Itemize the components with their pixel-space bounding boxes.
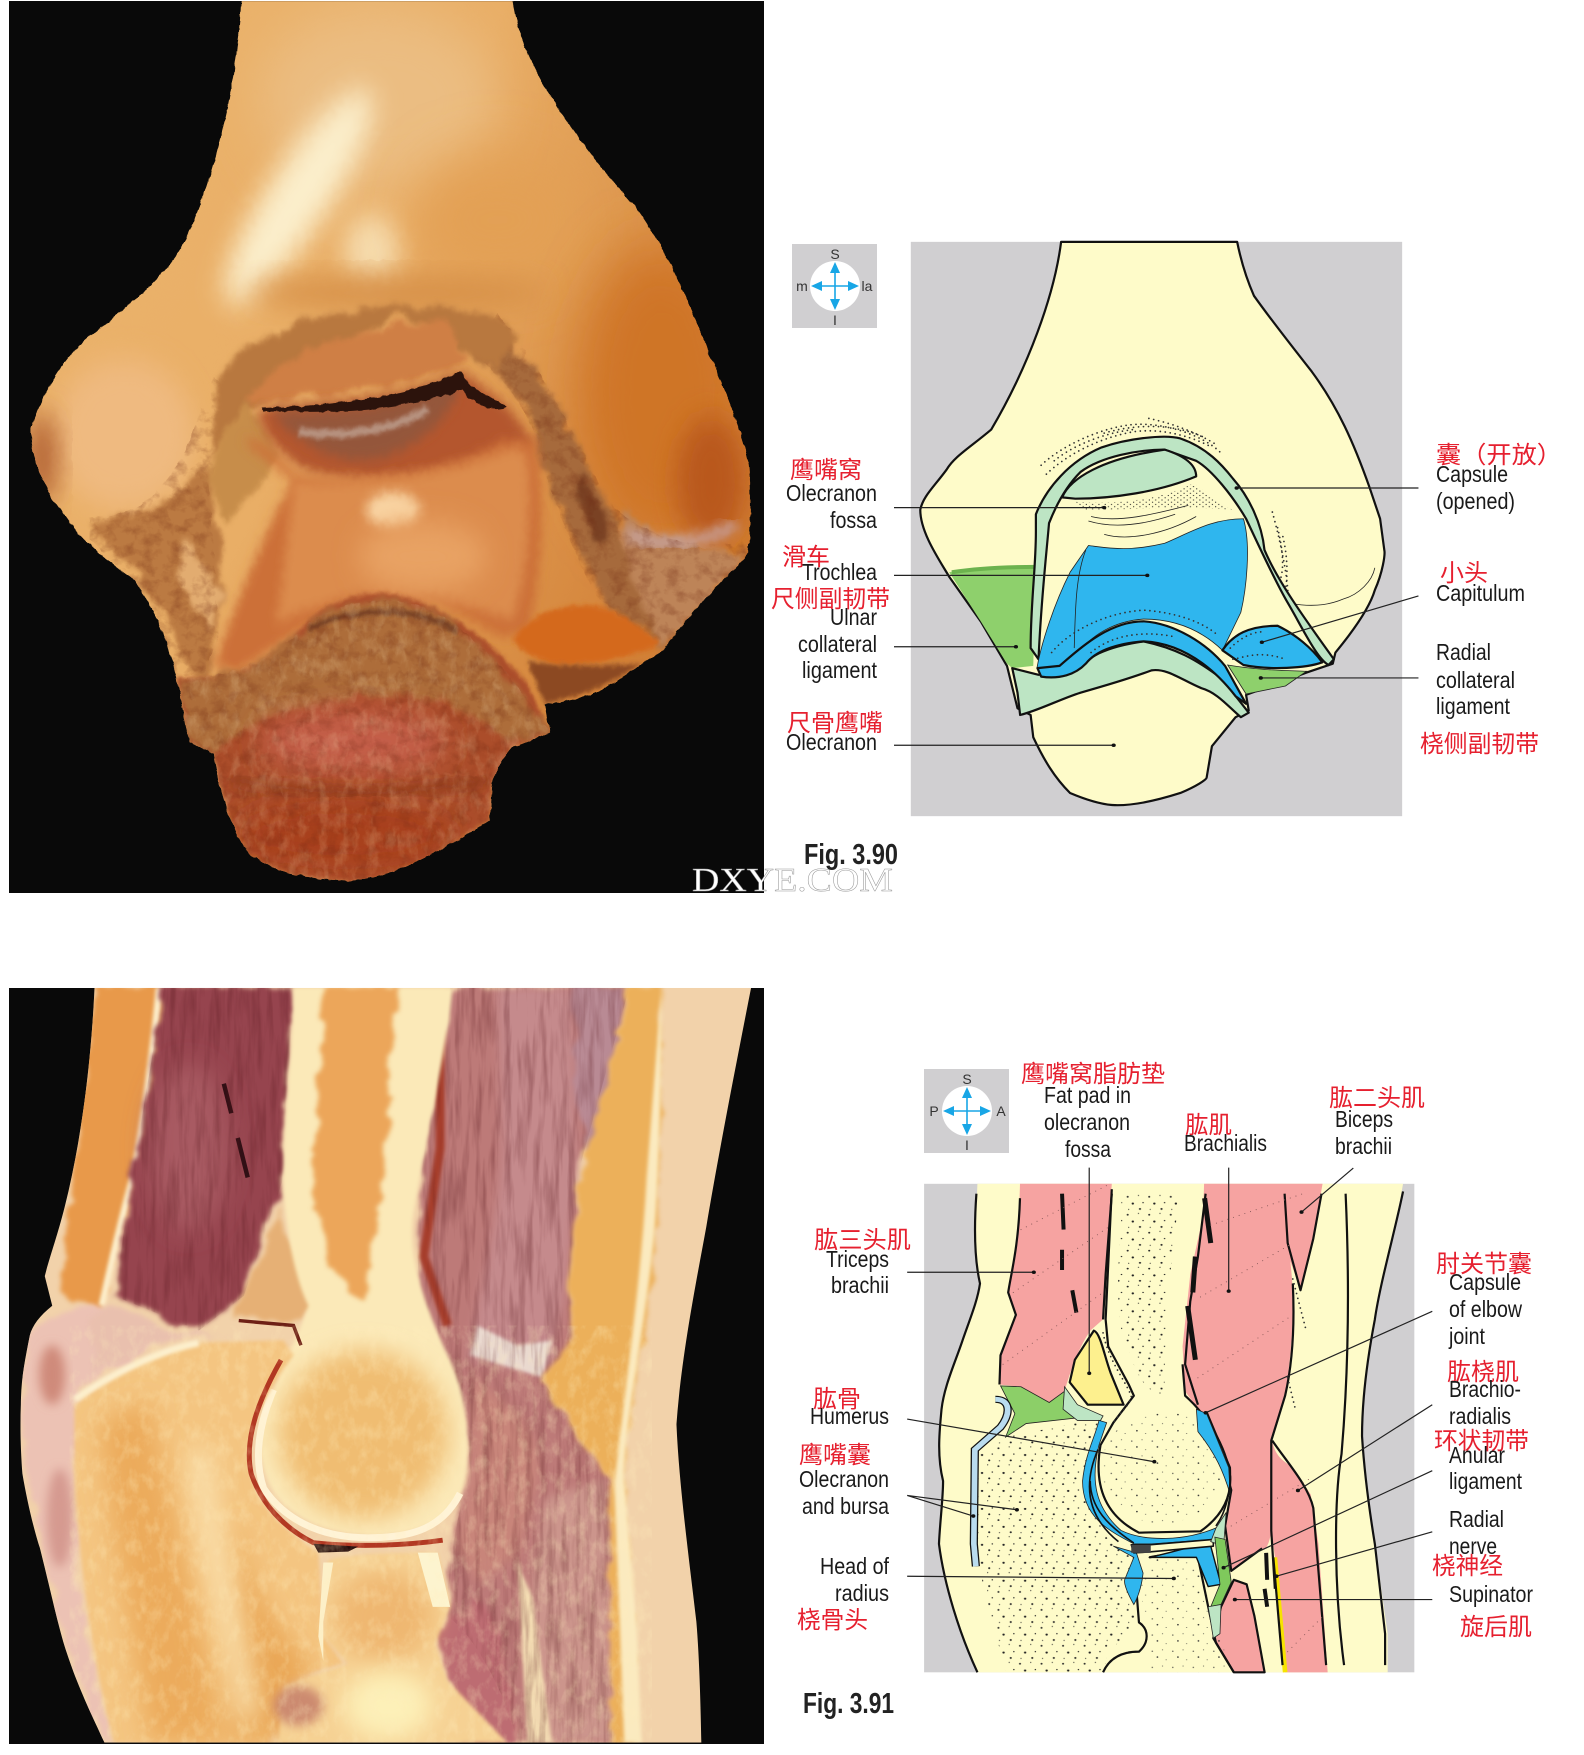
anular ligament: [1211, 1537, 1231, 1607]
radius: [279, 1553, 507, 1743]
label: olecranon: [786, 710, 883, 755]
orientation compass: S I m la: I: [833, 312, 837, 328]
label: ulnar collateral ligament: [771, 586, 890, 683]
label: radial collateral ligament: 桡侧副韧带: [1420, 731, 1539, 758]
ulnar collateral ligament: [949, 566, 1036, 668]
label: head of radius: [797, 1553, 890, 1634]
label: capitulum: [1436, 560, 1525, 606]
label: capitulum: 小头: [1440, 560, 1488, 587]
label: biceps brachii: [1329, 1085, 1425, 1159]
label: ulnar collateral ligament: collateral: [798, 631, 877, 657]
label: trochlea: [782, 544, 877, 585]
label: head of radius: Head of: [820, 1553, 890, 1579]
label: ulnar collateral ligament: 尺侧副韧带: [771, 586, 890, 613]
label: capsule of elbow joint: Capsule: [1449, 1269, 1521, 1295]
orientation compass: S I m la: [792, 244, 877, 328]
label: humerus: Humerus: [810, 1403, 889, 1429]
label: olecranon: Olecranon: [786, 729, 877, 755]
label: capsule of elbow joint: of elbow: [1449, 1296, 1522, 1322]
olecranon fat pad: [1070, 1331, 1124, 1405]
label: radial nerve: Radial: [1449, 1506, 1504, 1532]
label: radial collateral ligament: collateral: [1436, 667, 1515, 693]
label: trochlea: Trochlea: [802, 559, 877, 585]
label: radial nerve: nerve: [1449, 1533, 1497, 1559]
label: triceps brachii: brachii: [831, 1272, 889, 1298]
diagram: Fig. 3.90 humerus posterior view: [894, 242, 1418, 816]
label: humerus: [810, 1386, 889, 1429]
figure caption: Fig. 3.90: Fig. 3.90: [804, 839, 898, 871]
label: brachioradialis: [1447, 1359, 1521, 1429]
label: capsule of elbow joint: [1436, 1251, 1532, 1349]
supinator muscle: [1213, 1580, 1265, 1672]
orientation compass: S I P A: I: [965, 1137, 969, 1153]
joint line: [239, 1321, 301, 1345]
label: radial collateral ligament: [1420, 639, 1539, 758]
leader lines: [907, 1168, 1432, 1601]
label: anular ligament: Anular: [1449, 1442, 1505, 1468]
label: supinator: [1449, 1581, 1533, 1641]
orientation compass: S I m la: m: [796, 278, 808, 294]
label: supinator: 旋后肌: [1460, 1614, 1532, 1641]
leader lines: [894, 486, 1418, 747]
label: capitulum: Capitulum: [1436, 580, 1525, 606]
label: capsule opened: Capsule: [1436, 461, 1508, 487]
label: olecranon and bursa: 鹰嘴囊: [799, 1442, 871, 1469]
label: capsule of elbow joint: joint: [1448, 1323, 1486, 1349]
label: radial collateral ligament: Radial: [1436, 639, 1491, 665]
label: ulnar collateral ligament: Ulnar: [830, 604, 877, 630]
medial stipple: [1041, 418, 1220, 474]
watermark: DXYE.COM: DXYE.COM: [692, 862, 893, 899]
label: olecranon fossa: fossa: [830, 507, 877, 533]
radial collateral ligament: [1228, 665, 1307, 694]
label: biceps brachii: brachii: [1335, 1133, 1392, 1159]
ulna stipple: [977, 1423, 1139, 1672]
label: ulnar collateral ligament: ligament: [802, 657, 878, 683]
trochlea, articular cartilage: [1037, 519, 1247, 668]
label: olecranon and bursa: Olecranon: [799, 1466, 889, 1492]
label: radial nerve: [1432, 1506, 1504, 1580]
radial nerve: [1275, 1557, 1285, 1672]
photo: sagittal section of the elbow, Fig. 3.91: [0, 980, 776, 1750]
label: anular ligament: ligament: [1449, 1468, 1523, 1494]
label: triceps brachii: [814, 1227, 911, 1298]
label: radial collateral ligament: ligament: [1436, 693, 1511, 719]
label: olecranon and bursa: and bursa: [802, 1493, 889, 1519]
label: capsule opened: [1436, 442, 1562, 514]
capitulum: [1222, 626, 1322, 668]
humerus bone outline: [1099, 1189, 1230, 1533]
label: supinator: Supinator: [1449, 1581, 1533, 1607]
label: fat pad in olecranon fossa: Fat pad in: [1044, 1082, 1131, 1108]
label: olecranon fossa: [786, 457, 877, 533]
triceps muscle: [114, 988, 293, 1330]
label: capsule opened: 囊（开放）: [1436, 442, 1562, 469]
label: capsule opened: (opened): [1436, 488, 1515, 514]
humerus shaft stipple: [1118, 1194, 1177, 1396]
label: olecranon fossa: 鹰嘴窝: [790, 457, 862, 484]
anterior muscle: [418, 988, 629, 1743]
triceps brachii muscle: [999, 1184, 1112, 1402]
orientation compass: S I P A: [924, 1069, 1009, 1153]
label: triceps brachii: 肱三头肌: [814, 1227, 911, 1254]
label: capsule of elbow joint: 肘关节囊: [1436, 1251, 1532, 1278]
orientation compass: S I m la: S: [830, 246, 840, 262]
orientation compass: S I P A: S: [962, 1071, 972, 1087]
label: brachioradialis: Brachio-: [1449, 1376, 1521, 1402]
label: olecranon fossa: Olecranon: [786, 480, 877, 506]
label: biceps brachii: Biceps: [1335, 1106, 1393, 1132]
label: humerus: 肱骨: [813, 1386, 861, 1413]
label: brachialis: Brachialis: [1184, 1130, 1267, 1156]
label: anular ligament: 环状韧带: [1434, 1428, 1529, 1455]
label: fat pad in olecranon fossa: [1021, 1061, 1165, 1162]
figure caption: Fig. 3.91: Fig. 3.91: [803, 1688, 894, 1720]
label: trochlea: 滑车: [782, 544, 830, 571]
photo: posterior view of dissected elbow joint, Fig. 3.90: [0, 0, 776, 893]
triceps tendon insertion: [1001, 1386, 1075, 1437]
label: fat pad in olecranon fossa: 鹰嘴窝脂肪垫: [1021, 1061, 1165, 1088]
label: brachioradialis: 肱桡肌: [1447, 1359, 1519, 1386]
diagram: Fig. 3.91 sagittal section: [907, 1168, 1432, 1672]
limb skin and subcutaneous fat: [939, 1184, 1403, 1672]
fat, posterior: [60, 988, 164, 1311]
label: brachialis: [1184, 1112, 1267, 1156]
label: fat pad in olecranon fossa: fossa: [1065, 1136, 1111, 1162]
olecranon bursa: [974, 1399, 1008, 1566]
label: radial nerve: 桡神经: [1432, 1553, 1503, 1580]
label: brachioradialis: radialis: [1449, 1403, 1511, 1429]
humerus and olecranon outline: [920, 242, 1385, 805]
grey diagram panel: [924, 1184, 1414, 1672]
radius stipple: [1139, 1557, 1231, 1672]
label: olecranon and bursa: [799, 1442, 889, 1519]
label: biceps brachii: 肱二头肌: [1329, 1085, 1425, 1112]
label: head of radius: 桡骨头: [797, 1607, 868, 1634]
label: head of radius: radius: [835, 1580, 889, 1606]
label: brachialis: 肱肌: [1185, 1112, 1232, 1139]
brachialis and biceps muscle: [1183, 1184, 1328, 1672]
label: olecranon: 尺骨鹰嘴: [787, 710, 883, 737]
orientation compass: S I P A: A: [996, 1103, 1006, 1119]
elbow joint capsule and cartilage: [1083, 1409, 1230, 1605]
joint capsule, opened: [1031, 437, 1334, 665]
grey diagram panel: [911, 242, 1402, 816]
orientation compass: S I m la: la: [862, 278, 873, 294]
label: triceps brachii: Triceps: [826, 1246, 889, 1272]
label: anular ligament: [1434, 1428, 1529, 1494]
humerus: [261, 988, 468, 1535]
orientation compass: S I P A: P: [929, 1103, 939, 1119]
label: fat pad in olecranon fossa: olecranon: [1044, 1109, 1130, 1135]
ulna: [75, 1340, 343, 1743]
fat, anterior: [542, 988, 662, 1743]
